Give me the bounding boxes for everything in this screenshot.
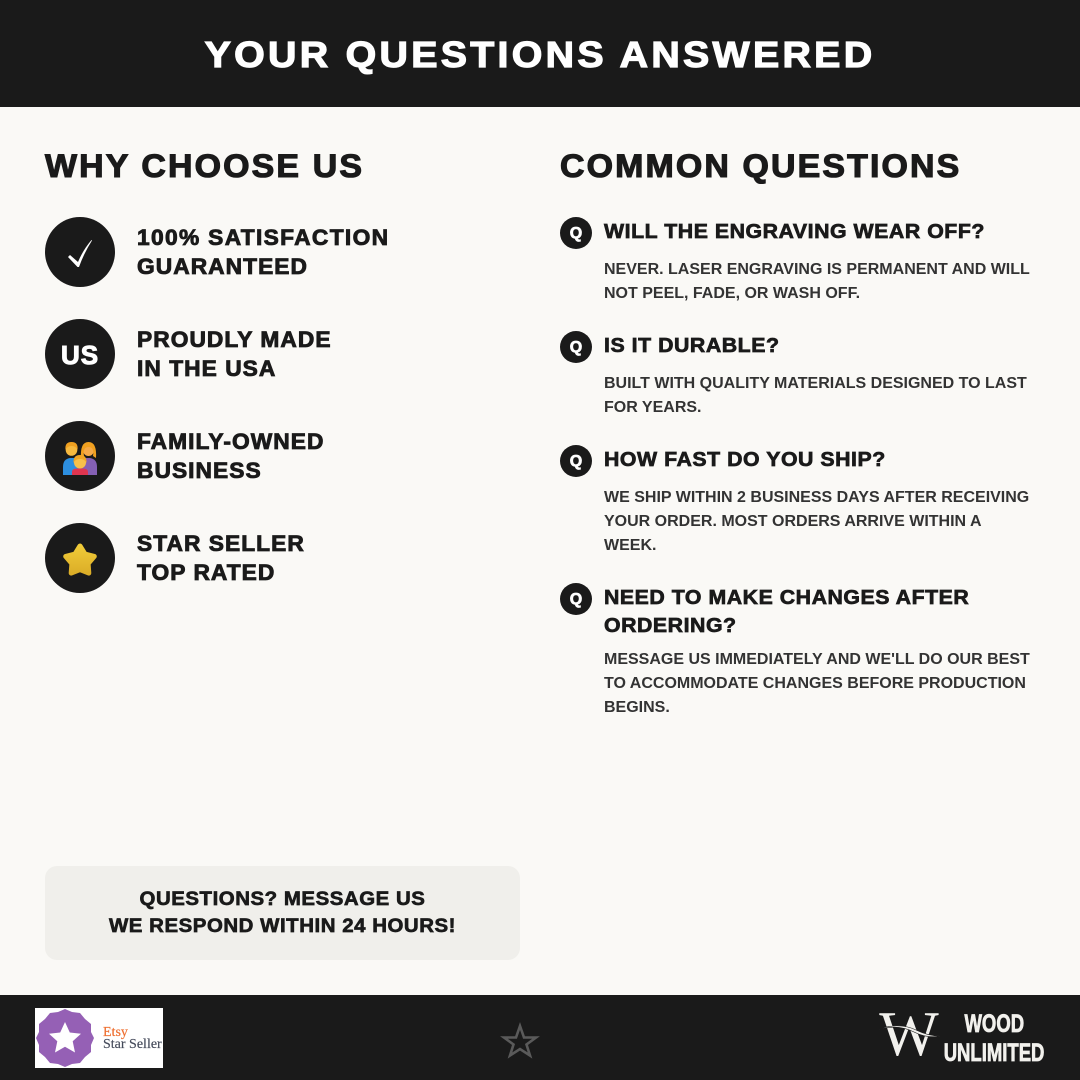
badge: Etsy star seller: Etsy — [103, 1025, 128, 1040]
reason: made in USA: PROUDLY MADE — [137, 327, 332, 352]
Q badge: Q — [570, 225, 582, 242]
icon: outline star — [500, 1022, 540, 1058]
callout text — [108, 889, 456, 937]
Q badge: Q — [570, 591, 582, 608]
callout text: QUESTIONS? MESSAGE US — [140, 889, 425, 910]
title: YOUR QUESTIONS ANSWERED — [205, 34, 875, 75]
answer: WEEK. — [604, 537, 656, 554]
reason: made in USA — [137, 327, 332, 381]
answer — [604, 489, 1029, 554]
header bar — [0, 0, 1080, 107]
reason: satisfaction: GUARANTEED — [137, 254, 308, 279]
answer: NOT PEEL, FADE, OR WASH OFF. — [604, 285, 860, 302]
answer: WE SHIP WITHIN 2 BUSINESS DAYS AFTER RECEIVING — [604, 489, 1029, 506]
heading: why choose us: WHY CHOOSE US — [45, 148, 364, 184]
reason: star seller: TOP RATED — [137, 560, 275, 585]
callout text: WE RESPOND WITHIN 24 HOURS! — [109, 916, 456, 937]
reason: family-owned — [137, 429, 324, 483]
answer: TO ACCOMMODATE CHANGES BEFORE PRODUCTION — [604, 675, 1026, 692]
footer bar — [0, 995, 1080, 1080]
badge: Etsy star seller — [35, 1008, 163, 1068]
answer — [604, 261, 1030, 302]
icon: US: US — [61, 340, 99, 370]
answer: BUILT WITH QUALITY MATERIALS DESIGNED TO LAST — [604, 375, 1027, 392]
question: HOW FAST DO YOU SHIP? — [604, 449, 886, 471]
Q badge — [560, 583, 592, 615]
callout: message us — [45, 866, 520, 960]
reason: satisfaction — [137, 225, 389, 279]
answer: NEVER. LASER ENGRAVING IS PERMANENT AND WILL — [604, 261, 1030, 278]
answer — [604, 375, 1027, 416]
icon: star — [45, 523, 115, 593]
reason: star seller: STAR SELLER — [137, 531, 305, 556]
question — [604, 587, 969, 637]
badge: Etsy star seller: Star Seller — [103, 1037, 162, 1052]
reason: family-owned: FAMILY-OWNED — [137, 429, 324, 454]
answer: MESSAGE US IMMEDIATELY AND WE'LL DO OUR BEST — [604, 651, 1030, 668]
answer — [604, 651, 1030, 716]
icon: US — [45, 319, 115, 389]
panel: question 2 — [560, 331, 1027, 416]
answer: YOUR ORDER. MOST ORDERS ARRIVE WITHIN A — [604, 513, 982, 530]
question: NEED TO MAKE CHANGES AFTER — [604, 587, 969, 609]
Q badge — [560, 445, 592, 477]
reason: satisfaction: 100% SATISFACTION — [137, 225, 389, 250]
Q badge: Q — [570, 453, 582, 470]
reason: star seller — [136, 531, 305, 585]
question: ORDERING? — [604, 615, 737, 637]
panel: question 3 — [560, 445, 1029, 554]
reason: made in USA: IN THE USA — [137, 356, 276, 381]
panel: question 1 — [560, 217, 1030, 302]
Q badge — [560, 217, 592, 249]
panel: question 4 — [560, 583, 1030, 716]
Q badge: Q — [570, 339, 582, 356]
reason: family-owned: BUSINESS — [137, 458, 262, 483]
icon: family — [45, 421, 115, 491]
logo text: UNLIMITED — [944, 1039, 1045, 1067]
answer: FOR YEARS. — [604, 399, 702, 416]
logo text — [944, 1010, 1045, 1067]
heading: common questions: COMMON QUESTIONS — [560, 148, 961, 184]
answer: BEGINS. — [604, 699, 670, 716]
icon: check mark — [45, 217, 115, 287]
logo: Wood Unlimited — [879, 1004, 1045, 1067]
Q badge — [560, 331, 592, 363]
logo text: WOOD — [965, 1010, 1024, 1038]
question: IS IT DURABLE? — [604, 335, 779, 357]
question: WILL THE ENGRAVING WEAR OFF? — [604, 221, 985, 243]
